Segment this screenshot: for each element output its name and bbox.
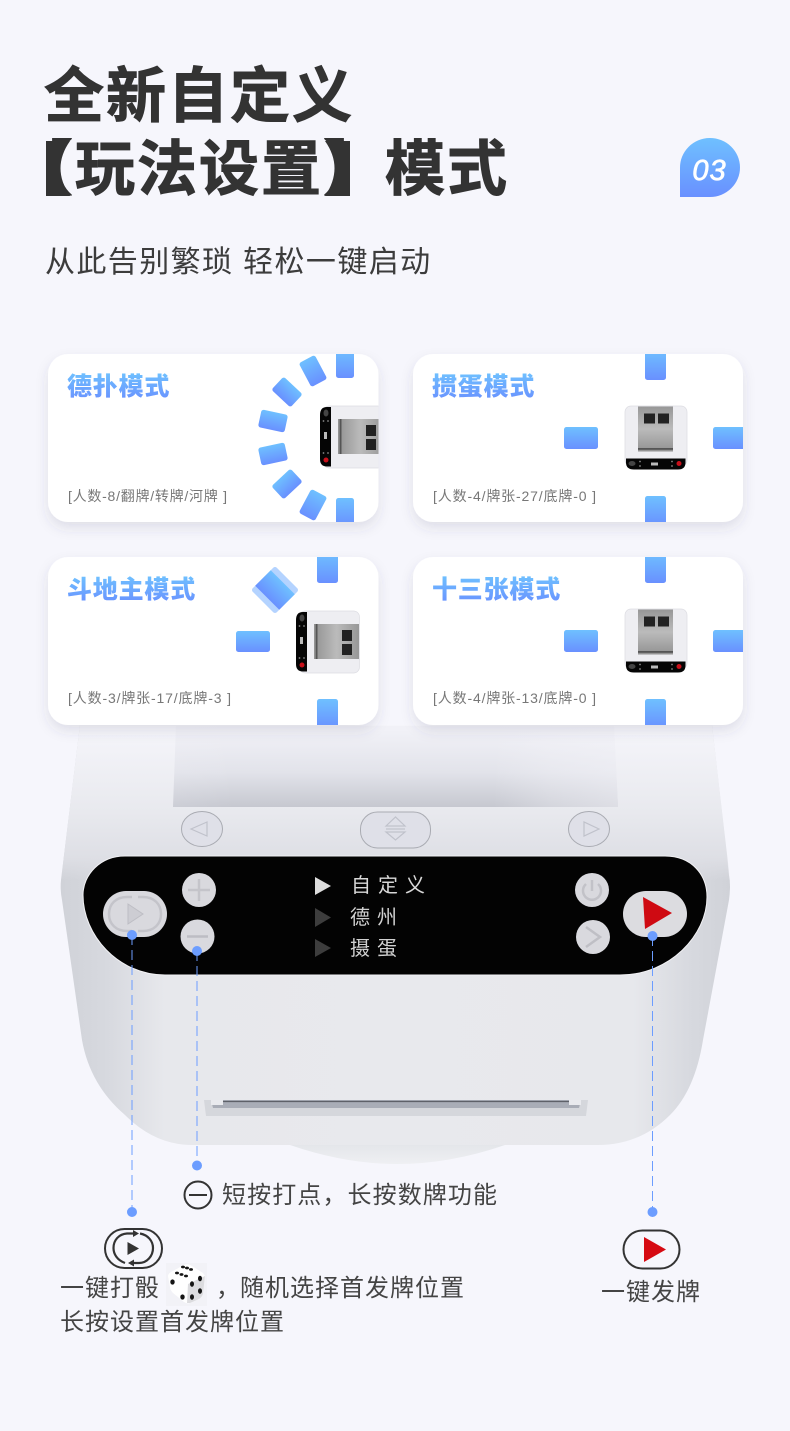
card spec: [人数-4/牌张-27/底牌-0 ] [433, 488, 597, 504]
title: 全新自定义 [44, 63, 354, 130]
badge: 03: 03 [692, 155, 727, 187]
button: centre switch [360, 812, 430, 848]
title [13, 63, 509, 203]
landlord stacked cards [251, 566, 299, 614]
card title: 掼蛋模式 [432, 373, 535, 401]
device body [61, 725, 730, 1145]
button: power [575, 873, 609, 907]
card: 斗地主模式 [48, 553, 378, 729]
text: shuffle description: 随机选择首发牌位置 [240, 1275, 465, 1302]
mini device [625, 609, 687, 672]
button: plus [182, 873, 216, 907]
card: 掼蛋模式 [413, 350, 753, 526]
screen menu: 自定义 [351, 874, 432, 897]
card spec: [人数-4/牌张-13/底牌-0 ] [433, 690, 597, 706]
card rectangles fan [258, 350, 354, 526]
card title: 十三张模式 [432, 576, 561, 604]
mini device [296, 611, 360, 673]
device body top shading [61, 725, 730, 880]
screen menu [315, 874, 432, 960]
mini device [320, 406, 384, 468]
text: shuffle description: ， [216, 1275, 240, 1302]
card: 十三张模式 [413, 553, 753, 729]
card rectangles [564, 553, 753, 729]
badge: 03 [680, 138, 740, 197]
button: shuffle [103, 891, 167, 937]
text: shuffle description: 一键打骰 [60, 1275, 160, 1302]
device illustration [61, 725, 730, 1164]
icon: dice [166, 1263, 207, 1306]
card spec: [人数-3/牌张-17/底牌-3 ] [68, 690, 232, 706]
text: deal description: 一键发牌 [601, 1279, 701, 1306]
black control panel [83, 856, 707, 975]
screen menu: 摄蛋 [350, 937, 404, 960]
button: left arrow [182, 812, 222, 846]
callout line: deal [648, 931, 658, 1217]
card spec: [人数-8/翻牌/转牌/河牌 ] [68, 488, 228, 504]
button: right arrow [568, 812, 610, 846]
card rectangles [236, 553, 338, 729]
title: 【玩法设置】模式 [13, 136, 509, 203]
button: minus [180, 920, 214, 954]
text: minus description: 短按打点，长按数牌功能 [222, 1182, 498, 1209]
card title: 斗地主模式 [67, 576, 196, 604]
icon: minus button [184, 1182, 212, 1208]
card slot [204, 1100, 588, 1116]
callout line: minus [192, 946, 202, 1170]
subtitle: 从此告别繁琐 轻松一键启动 [45, 246, 432, 279]
icon: shuffle button [105, 1229, 162, 1268]
text: shuffle description: 长按设置首发牌位置 [60, 1309, 285, 1336]
card tray recess [173, 726, 618, 807]
callout line: shuffle [127, 930, 137, 1217]
text: shuffle description [60, 1275, 465, 1336]
card: 德扑模式 [48, 350, 384, 526]
button: next [576, 920, 610, 954]
mini device [625, 406, 687, 470]
card rectangles [564, 350, 753, 526]
screen menu: 德州 [350, 906, 404, 929]
device base bulge [290, 1145, 505, 1164]
icon: deal button [624, 1230, 680, 1268]
button: deal [623, 891, 687, 937]
card title: 德扑模式 [67, 373, 170, 401]
